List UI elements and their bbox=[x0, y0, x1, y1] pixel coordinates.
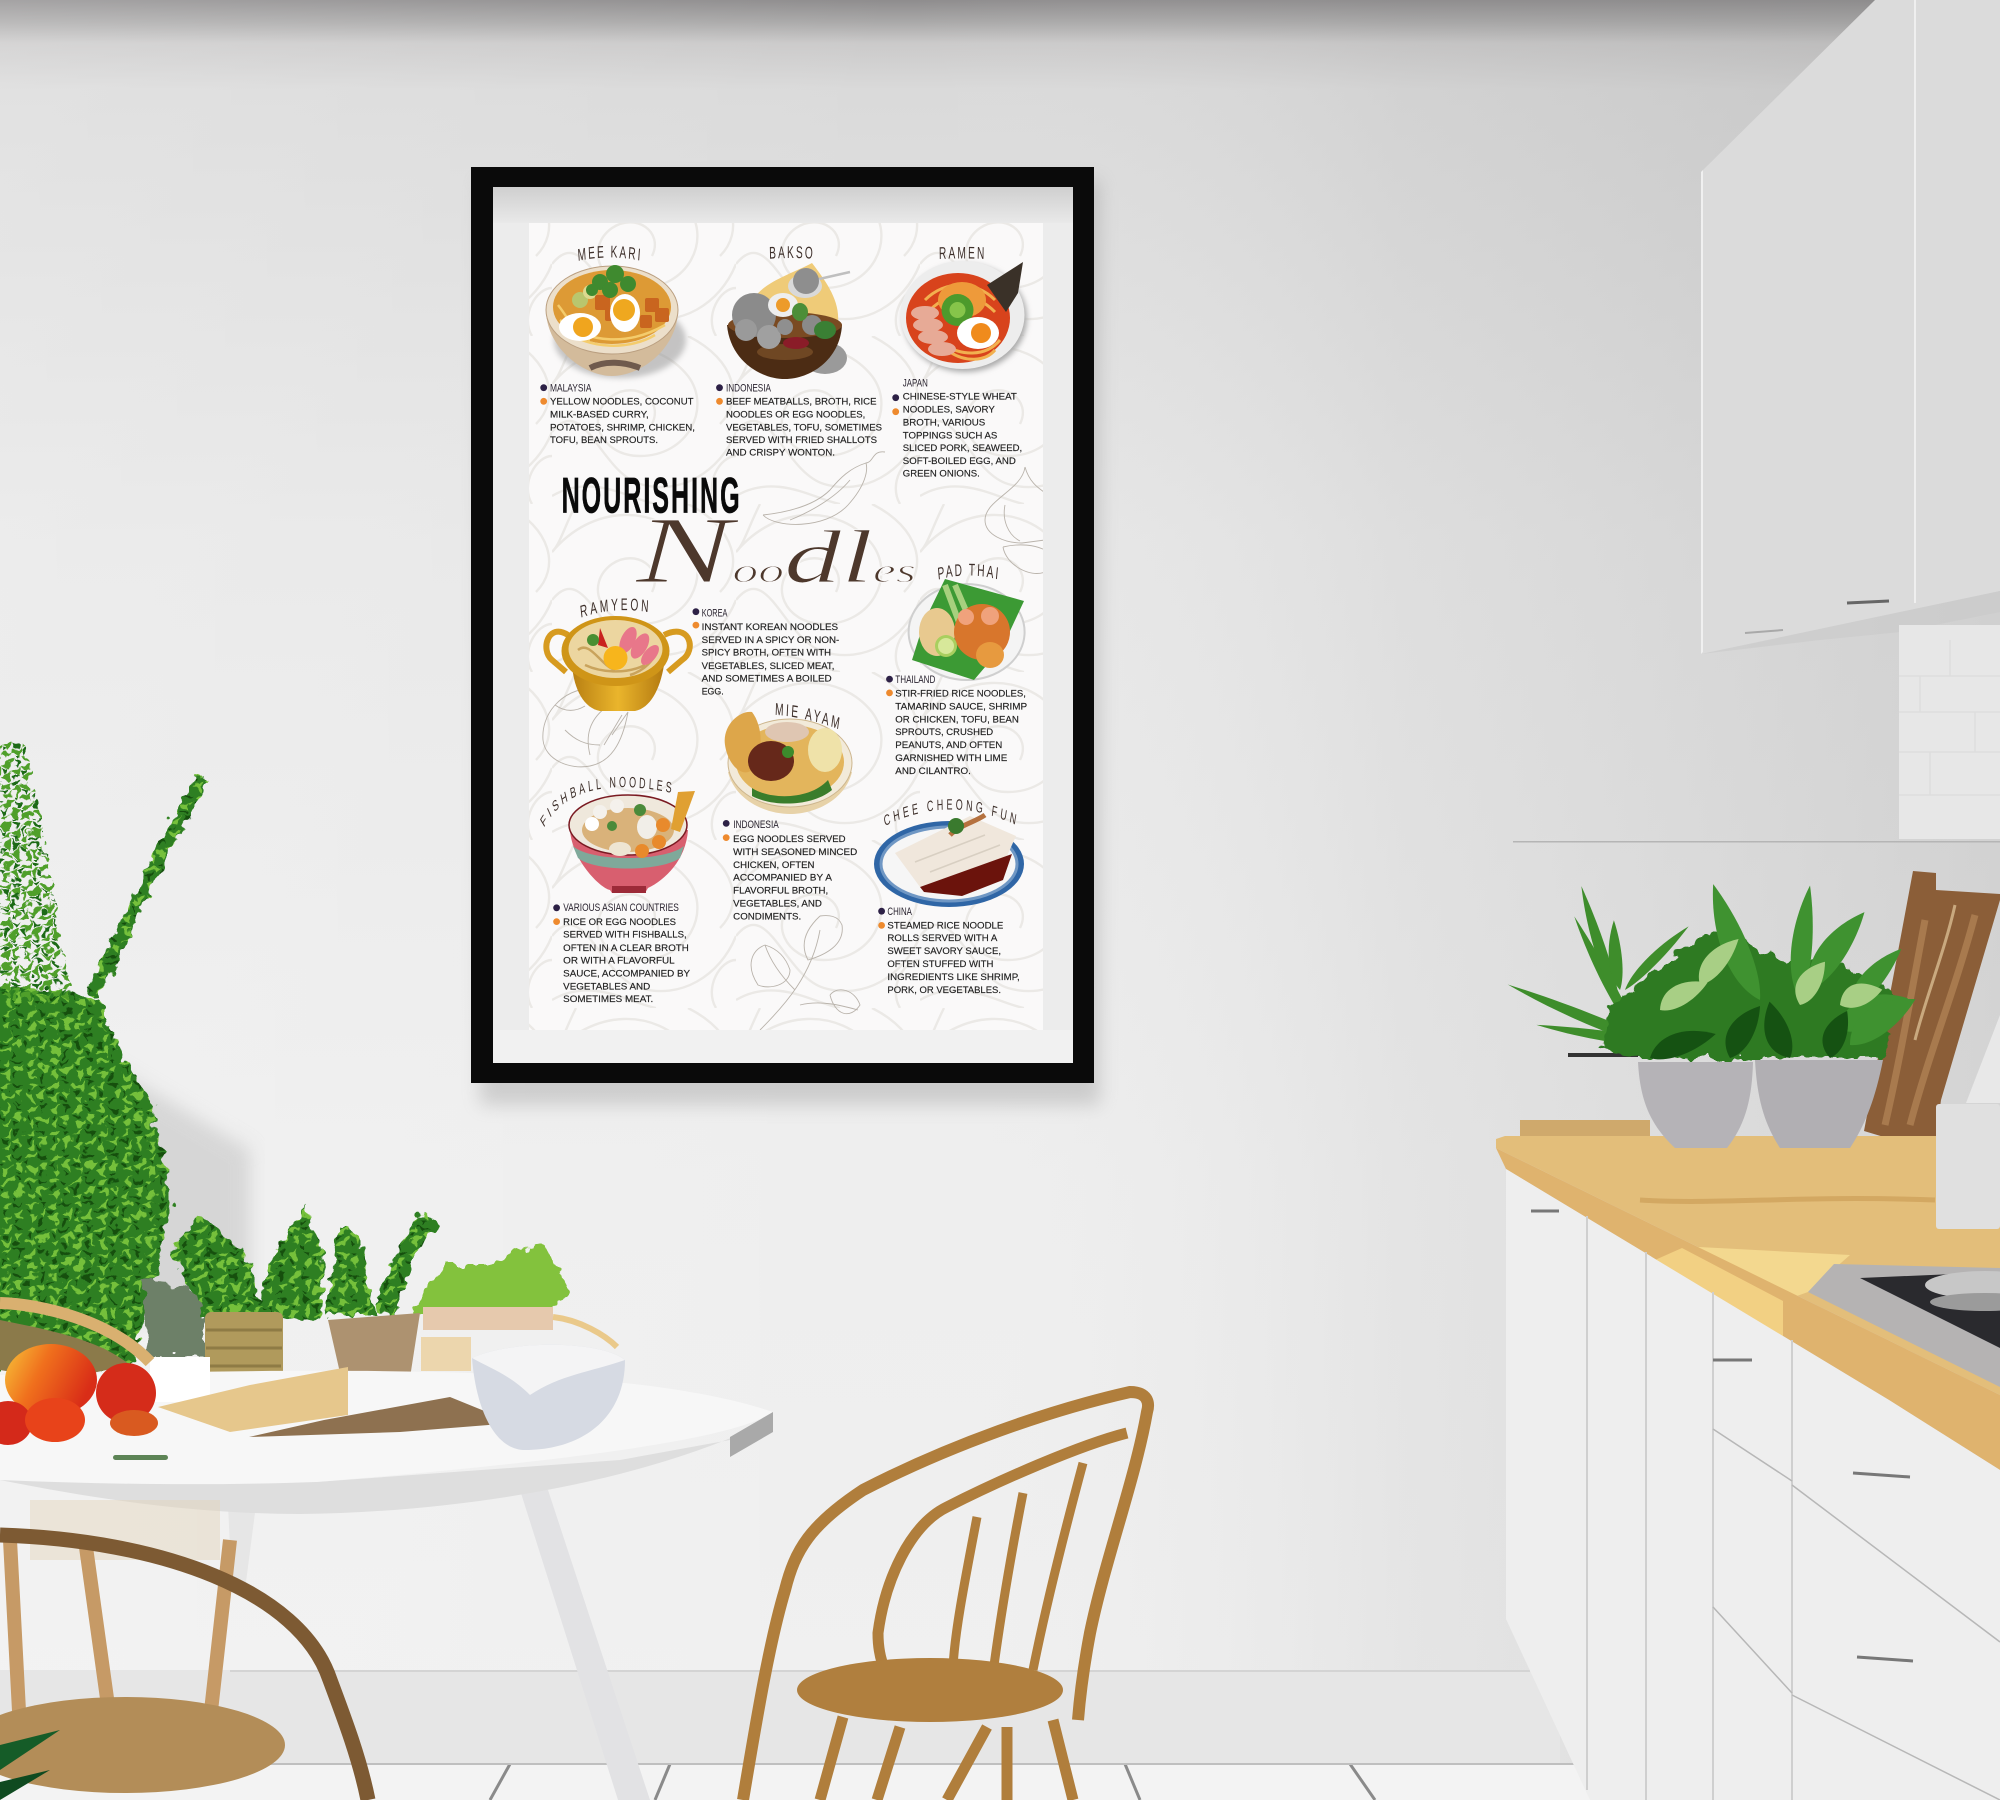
description: ramyeon: INSTANT KOREAN NOODLES bbox=[702, 622, 838, 632]
description: mie ayam: WITH SEASONED MINCED bbox=[733, 847, 858, 857]
heading: chee cheong fun: CHEE CHEONG FUN bbox=[884, 799, 1016, 825]
description: mie ayam: CHICKEN, OFTEN bbox=[733, 860, 814, 870]
description: mee kari: YELLOW NOODLES, COCONUT bbox=[550, 397, 694, 407]
description: mee kari bbox=[540, 397, 695, 445]
books and band bbox=[421, 1307, 617, 1371]
heading: mee kari: MEE KARI bbox=[578, 246, 640, 261]
title: Noodles script: N oodl es bbox=[634, 497, 916, 603]
country: japan: JAPAN bbox=[903, 377, 928, 389]
description: ramen: SLICED PORK, SEAWEED, bbox=[903, 443, 1022, 453]
white bowl bbox=[472, 1345, 625, 1450]
description: mee kari: TOFU, BEAN SPROUTS. bbox=[550, 435, 658, 445]
heading: mie ayam: MIE AYAM bbox=[776, 703, 840, 729]
description: pad thai: SPROUTS, CRUSHED bbox=[895, 727, 993, 737]
illustration: ramyeon gold pot bbox=[546, 616, 690, 711]
description: ramen: SOFT-BOILED EGG, AND bbox=[903, 456, 1016, 466]
panel: ramyeon bbox=[543, 598, 839, 711]
potted plants on the counter bbox=[1505, 881, 1921, 1148]
description: bakso bbox=[716, 397, 882, 458]
description: mee kari: MILK-BASED CURRY, bbox=[550, 410, 649, 420]
heading: ramen: RAMEN bbox=[940, 246, 984, 259]
description: chee cheong fun: ROLLS SERVED WITH A bbox=[887, 933, 998, 943]
country: various asian countries: VARIOUS ASIAN COUNTRIES bbox=[563, 902, 679, 914]
illustration: mie ayam bowl bbox=[725, 712, 852, 814]
illustration: pad thai plate bbox=[909, 579, 1025, 680]
sketch: garlic bbox=[985, 467, 1048, 573]
description: ramen: TOPPINGS SUCH AS bbox=[903, 430, 997, 440]
illustration: fishball bowl bbox=[569, 791, 695, 893]
panel: fishball noodles bbox=[540, 776, 695, 1002]
illustration: bakso bowl bbox=[727, 263, 850, 379]
table plants and pots bbox=[142, 1208, 569, 1417]
description: mie ayam: VEGETABLES, AND bbox=[733, 898, 822, 908]
description: bakso: VEGETABLES, TOFU, SOMETIMES bbox=[726, 422, 882, 432]
description: pad thai bbox=[886, 689, 1027, 776]
heading: bakso: BAKSO bbox=[770, 246, 812, 259]
table bbox=[0, 1357, 773, 1800]
illustration: mee kari bowl bbox=[546, 265, 686, 378]
left chair bbox=[0, 1500, 368, 1800]
right chair bbox=[743, 1392, 1148, 1800]
description: pad thai: PEANUTS, AND OFTEN bbox=[895, 740, 1002, 750]
description: fishball noodles: OR WITH A FLAVORFUL bbox=[563, 956, 675, 966]
description: fishball noodles bbox=[553, 917, 690, 1004]
country: thailand bbox=[886, 676, 935, 683]
heading: fishball noodles: FISHBALL NOODLES bbox=[540, 776, 672, 827]
description: chee cheong fun bbox=[878, 920, 1020, 995]
tall plant on the left bbox=[0, 733, 250, 1370]
description: ramen bbox=[892, 392, 1022, 479]
description: bakso: AND CRISPY WONTON. bbox=[726, 448, 835, 458]
country: indonesia: INDONESIA bbox=[733, 819, 779, 831]
illustration: ramen bowl bbox=[900, 261, 1027, 372]
description: mee kari: POTATOES, SHRIMP, CHICKEN, bbox=[550, 422, 695, 432]
description: pad thai: AND CILANTRO. bbox=[895, 766, 971, 776]
description: pad thai: TAMARIND SAUCE, SHRIMP bbox=[895, 702, 1027, 712]
frame shadow bbox=[480, 180, 1100, 1105]
panel: chee cheong fun bbox=[874, 799, 1024, 994]
country: thailand: THAILAND bbox=[895, 674, 935, 686]
description: mie ayam: CONDIMENTS. bbox=[733, 912, 801, 922]
baseboard and floor bbox=[0, 1670, 2000, 1800]
description: ramen: BROTH, VARIOUS bbox=[903, 417, 985, 427]
sketch: shrimp bbox=[543, 688, 628, 767]
description: ramyeon: SERVED IN A SPICY OR NON- bbox=[702, 635, 839, 645]
description: pad thai: STIR-FRIED RICE NOODLES, bbox=[895, 689, 1026, 699]
sketch: chili bbox=[763, 452, 885, 524]
description: bakso: NOODLES OR EGG NOODLES, bbox=[726, 409, 865, 419]
country: china: CHINA bbox=[887, 906, 912, 918]
description: mie ayam bbox=[723, 834, 858, 922]
description: bakso: BEEF MEATBALLS, BROTH, RICE bbox=[726, 397, 876, 407]
description: pad thai: GARNISHED WITH LIME bbox=[895, 753, 1007, 763]
description: chee cheong fun: SWEET SAVORY SAUCE, bbox=[887, 946, 1001, 956]
description: ramyeon: AND SOMETIMES A BOILED bbox=[702, 674, 832, 684]
description: fishball noodles: SOMETIMES MEAT. bbox=[563, 994, 653, 1004]
description: chee cheong fun: OFTEN STUFFED WITH bbox=[887, 959, 993, 969]
description: chee cheong fun: PORK, OR VEGETABLES. bbox=[887, 985, 1001, 995]
country: korea: KOREA bbox=[702, 607, 728, 619]
panel: bakso bbox=[716, 246, 882, 456]
title: Nourishing: NOURISHING bbox=[562, 468, 742, 524]
description: fishball noodles: VEGETABLES AND bbox=[563, 981, 651, 991]
description: chee cheong fun: STEAMED RICE NOODLE bbox=[887, 920, 1003, 930]
description: fishball noodles: RICE OR EGG NOODLES bbox=[563, 917, 676, 927]
heading: pad thai: PAD THAI bbox=[938, 564, 998, 580]
description: ramyeon: EGG. bbox=[702, 687, 724, 697]
description: mie ayam: ACCOMPANIED BY A bbox=[733, 872, 833, 882]
country: korea bbox=[692, 608, 728, 616]
panel: pad thai bbox=[886, 564, 1027, 774]
kitchen counter and cooktop bbox=[1496, 1120, 2000, 1470]
country: malaysia: MALAYSIA bbox=[550, 382, 592, 394]
description: ramyeon bbox=[692, 622, 839, 697]
description: mie ayam: EGG NOODLES SERVED bbox=[733, 834, 846, 844]
country: china bbox=[878, 906, 912, 918]
fruit basket bbox=[0, 1303, 168, 1460]
upper cabinets bbox=[1701, 0, 2000, 654]
description: ramen: GREEN ONIONS. bbox=[903, 469, 980, 479]
panel: mee kari bbox=[540, 246, 694, 444]
sketch: cilantro bbox=[751, 916, 860, 1030]
poster frame bbox=[471, 167, 1094, 1083]
description: fishball noodles: SERVED WITH FISHBALLS, bbox=[563, 930, 687, 940]
description: ramyeon: SPICY BROTH, OFTEN WITH bbox=[702, 648, 831, 658]
illustration: chee cheong fun plate bbox=[874, 815, 1024, 907]
country: malaysia bbox=[540, 384, 592, 392]
description: bakso: SERVED WITH FRIED SHALLOTS bbox=[726, 435, 877, 445]
description: fishball noodles: SAUCE, ACCOMPANIED BY bbox=[563, 968, 690, 978]
cutting board bbox=[1864, 871, 2000, 1152]
country: indonesia bbox=[722, 820, 779, 828]
poster bbox=[529, 223, 1043, 1030]
description: mie ayam: FLAVORFUL BROTH, bbox=[733, 886, 828, 896]
description: fishball noodles: OFTEN IN A CLEAR BROTH bbox=[563, 943, 689, 953]
lower cabinets and drawers bbox=[1506, 1169, 2000, 1800]
utensil cup bbox=[1936, 1015, 2000, 1229]
tiled backsplash bbox=[1899, 625, 2000, 839]
description: chee cheong fun: INGREDIENTS LIKE SHRIMP, bbox=[887, 972, 1020, 982]
description: ramyeon: VEGETABLES, SLICED MEAT, bbox=[702, 661, 834, 671]
description: ramen: CHINESE-STYLE WHEAT bbox=[903, 392, 1017, 402]
country: indonesia: INDONESIA bbox=[726, 382, 771, 394]
panel: mie ayam bbox=[722, 703, 857, 920]
heading: ramyeon: RAMYEON bbox=[580, 598, 648, 618]
description: ramen: NOODLES, SAVORY bbox=[903, 405, 995, 415]
description: pad thai: OR CHICKEN, TOFU, BEAN bbox=[895, 714, 1019, 724]
country: indonesia bbox=[716, 384, 771, 392]
panel: ramen bbox=[892, 246, 1030, 477]
